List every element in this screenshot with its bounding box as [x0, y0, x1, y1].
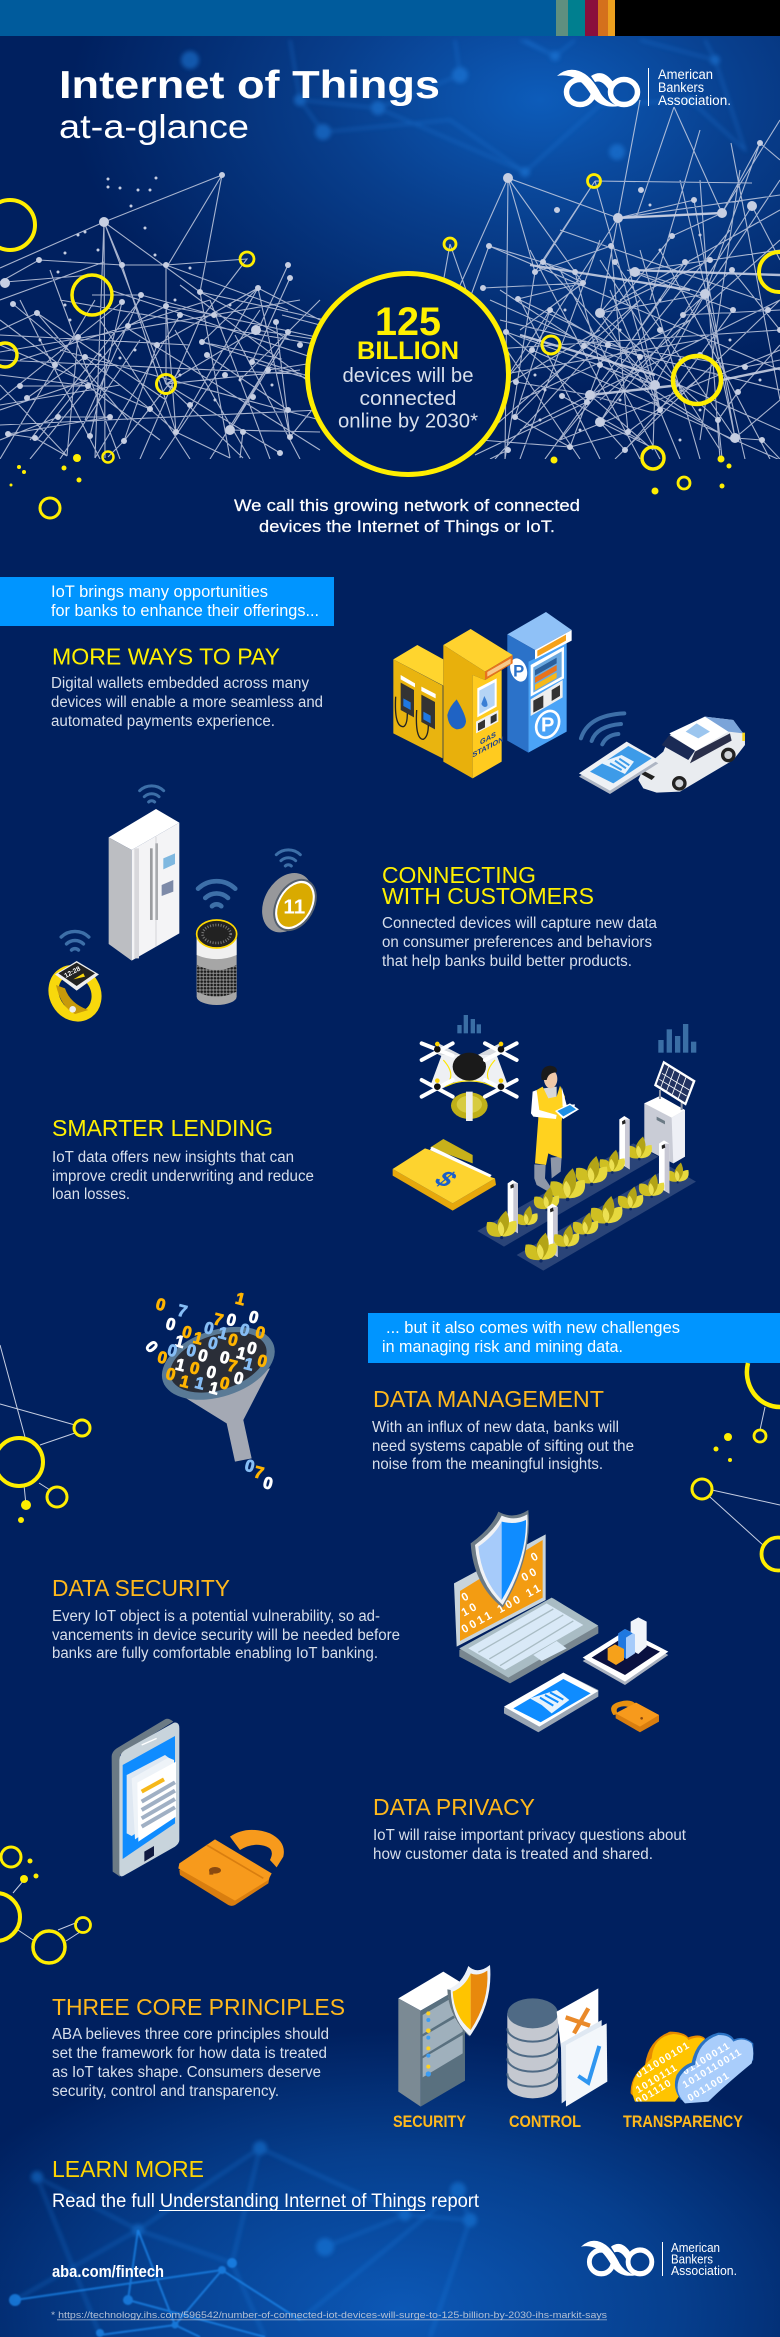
logo: American Bankers Association (bottom): Bankers — [671, 2252, 713, 2266]
icon: phone with bank — [579, 742, 658, 794]
data digits: 0 — [226, 1330, 240, 1350]
data digits: 0 — [256, 1351, 269, 1371]
funnel body — [153, 1314, 284, 1462]
banner: challenges — [368, 1313, 780, 1363]
data digits: 1 — [216, 1323, 230, 1344]
callout circle: 125 billion: online by 2030* — [338, 410, 478, 432]
yellow rings left — [0, 200, 254, 518]
plants and posts — [486, 1116, 689, 1263]
icon: folder with dollar: $ — [428, 1166, 465, 1192]
icon: smart speaker — [197, 920, 237, 1005]
logo: American Bankers Association (top): American — [658, 67, 713, 82]
icon: thermostat — [252, 864, 326, 941]
text block: connecting with customers — [382, 862, 657, 970]
icon: data clouds: 011000101 — [634, 2040, 693, 2081]
data digits: 0 — [154, 1294, 167, 1315]
text block: smarter lending: SMARTER LENDING — [52, 1115, 273, 1141]
logo: American Bankers Association (bottom): Association. — [671, 2264, 737, 2278]
icon: parking kiosk: P — [513, 662, 524, 681]
text block: data privacy: how customer data is treated and shared. — [373, 1846, 653, 1863]
text block: data privacy: DATA PRIVACY — [373, 1794, 535, 1820]
text block: more ways to pay: Digital wallets embedded across many — [51, 675, 309, 692]
text block: more ways to pay: automated payments experience. — [51, 713, 275, 730]
text block: learn more: Read the full Understanding Internet of Things report — [52, 2191, 480, 2212]
text block: learn more: LEARN MORE — [52, 2156, 204, 2182]
data digits: 1 — [242, 1354, 255, 1375]
banner: opportunities: for banks to enhance their offerings... — [51, 602, 319, 620]
banner: challenges: ... but it also comes with new challenges — [386, 1319, 680, 1337]
text block: connecting with customers: WITH CUSTOMERS — [382, 883, 594, 909]
title: Internet of Things — [59, 64, 440, 107]
data digits: 0 — [247, 1307, 260, 1328]
icon: folder with dollar — [393, 1139, 496, 1211]
data digits: 0 — [245, 1338, 259, 1359]
icon: data clouds: 1010110011 — [681, 2047, 745, 2091]
text block: three core principles: set the framework for how data is treated — [52, 2045, 327, 2062]
data digits: 0 — [164, 1364, 177, 1385]
blurred top network — [181, 40, 745, 177]
text block: data security: banks are fully comfortable enabling IoT banking. — [52, 1645, 378, 1662]
icon: data clouds — [631, 2032, 753, 2108]
data digits: 0 — [156, 1347, 169, 1368]
icon: data clouds: 1010111 — [634, 2062, 680, 2096]
logo: American Bankers Association (bottom) — [581, 2241, 737, 2278]
icons: principles — [398, 1965, 753, 2108]
callout circle: 125 billion: 125 — [375, 300, 441, 344]
data digits: 1 — [191, 1328, 205, 1349]
icon: fridge — [109, 809, 179, 961]
data digits: 0 — [238, 1320, 251, 1340]
icon: data clouds: 01100011 — [681, 2040, 733, 2078]
top glow — [0, 36, 780, 496]
data digits: 1 — [235, 1343, 248, 1364]
text block: three core principles: security, control and transparency. — [52, 2083, 279, 2100]
data digits: 0 — [166, 1340, 179, 1361]
text block: data management — [372, 1386, 634, 1473]
text block: data privacy: IoT will raise important privacy questions about — [373, 1827, 687, 1844]
icon: wifi signals — [61, 786, 300, 950]
data digits: 0 — [218, 1373, 231, 1394]
data digits: 1 — [178, 1371, 191, 1392]
text block: connecting with customers: on consumer preferences and behaviors — [382, 934, 652, 951]
text block: more ways to pay: MORE WAYS TO PAY — [52, 644, 280, 670]
bottom glow — [0, 1990, 780, 2337]
text block: connecting with customers: Connected devices will capture new data — [382, 915, 657, 932]
top colour bar — [0, 0, 780, 36]
icon: data clouds: 001110 — [634, 2077, 674, 2108]
icon: smart home devices — [45, 786, 326, 1024]
logo: American Bankers Association (bottom): American — [671, 2241, 720, 2255]
icon: thermostat: 11 — [283, 895, 305, 918]
title — [59, 64, 440, 145]
logo: American Bankers Association (top): Association. — [658, 93, 731, 108]
callout circle: 125 billion — [308, 274, 508, 474]
text block: three core principles: ABA believes three core principles should — [52, 2026, 329, 2043]
data digits: 1 — [173, 1331, 186, 1352]
principle labels: CONTROL — [509, 2113, 581, 2131]
icon: farmer — [531, 1066, 579, 1192]
decorative rings: right, upper — [692, 1363, 780, 1570]
text block: more ways to pay — [51, 644, 323, 730]
icon: laptop security — [454, 1510, 668, 1732]
text block: smarter lending: IoT data offers new insights that can — [52, 1149, 294, 1166]
icon: smart farm — [393, 1015, 696, 1271]
data digits: 1 — [207, 1378, 221, 1399]
data digits: 1 — [193, 1373, 206, 1394]
banner: challenges: in managing risk and mining data. — [382, 1338, 623, 1356]
icon: smart watch: 12:28 — [63, 965, 82, 980]
text block: connecting with customers: that help banks build better products. — [382, 953, 632, 970]
data digits: 0 — [185, 1340, 198, 1361]
intro text — [234, 496, 580, 536]
intro text: We call this growing network of connected — [234, 496, 580, 515]
growing beds — [477, 1143, 696, 1271]
banner: opportunities: IoT brings many opportunities — [51, 583, 268, 601]
icon: gas station kiosk: STATION — [472, 734, 504, 759]
footnote: * https://technology.ihs.com/596542/number-of-connected-iot-devices-will-surge-to-125-billion-by-2030-ihs-markit-says — [51, 2310, 607, 2321]
yellow rings right — [444, 174, 780, 494]
icon: open padlock — [178, 1830, 284, 1906]
data digits: 0 — [164, 1314, 177, 1335]
data digits: 0 — [205, 1362, 218, 1383]
data digits — [141, 1289, 275, 1494]
icon: laptop — [454, 1534, 598, 1683]
text block: connecting with customers: CONNECTING — [382, 862, 536, 888]
data digits: 7 — [212, 1309, 225, 1330]
principle labels — [393, 2113, 743, 2131]
data digits: 0 — [141, 1337, 162, 1356]
decorative rings: left, lower — [0, 1847, 90, 1963]
title: at-a-glance — [59, 108, 249, 145]
banner: opportunities — [0, 577, 334, 626]
icon: data clouds: 0011001 — [686, 2070, 732, 2104]
icon: tablet chart — [583, 1617, 668, 1685]
icon: fuel pump — [393, 645, 443, 758]
blurred bottom network — [15, 2141, 477, 2337]
callout circle: 125 billion: BILLION — [357, 337, 459, 365]
text block: smarter lending: improve credit underwriting and reduce — [52, 1168, 314, 1185]
data digits: 0 — [202, 1318, 216, 1339]
text block: smarter lending — [52, 1115, 314, 1203]
icon: parking kiosk: P — [541, 715, 554, 737]
text block: learn more — [52, 2156, 480, 2212]
chart icons — [457, 1015, 696, 1053]
data digits: 1 — [234, 1289, 247, 1309]
principle labels: SECURITY — [393, 2113, 466, 2131]
icon: smart watch — [45, 961, 105, 1024]
data digits: 0 — [225, 1310, 238, 1330]
intro text: devices the Internet of Things or IoT. — [259, 517, 555, 536]
text block: three core principles — [52, 1994, 345, 2100]
network graphic: left — [0, 175, 330, 459]
sharp bottom network — [9, 2230, 300, 2337]
data digits: 0 — [243, 1456, 256, 1476]
text block: data management: With an influx of new data, banks will — [372, 1419, 619, 1436]
icon: payment kiosks, phone and car — [393, 612, 745, 794]
data digits: 0 — [188, 1358, 201, 1379]
principle labels: TRANSPARENCY — [623, 2113, 743, 2131]
text block: data privacy — [373, 1794, 687, 1863]
icon: wifi — [581, 713, 624, 744]
icon: shield — [471, 1510, 529, 1608]
text block: data management: noise from the meaningful insights. — [372, 1456, 603, 1473]
text block: more ways to pay: devices will enable a more seamless and — [51, 694, 323, 711]
icon: laptop: 0 — [460, 1591, 471, 1604]
data digits: 7 — [226, 1356, 239, 1376]
icon: server with shield — [398, 1965, 490, 2107]
data digits: 0 — [218, 1347, 231, 1368]
text block: data management: need systems capable of sifting out the — [372, 1438, 634, 1455]
icon: laptop: 00 — [520, 1565, 541, 1584]
icon: laptop: 0 — [529, 1551, 540, 1564]
text block: smarter lending: loan losses. — [52, 1186, 130, 1203]
callout circle: 125 billion: devices will be — [342, 364, 474, 387]
data digits: 0 — [206, 1333, 220, 1354]
data digits: 0 — [261, 1473, 275, 1494]
data digits: 7 — [176, 1301, 189, 1321]
icon: parking kiosk — [507, 612, 572, 753]
logo: American Bankers Association (top): Bankers — [658, 80, 704, 95]
data digits: 1 — [174, 1355, 187, 1375]
data digits: 7 — [252, 1462, 266, 1483]
data digits: 0 — [180, 1322, 194, 1343]
data digits: 0 — [232, 1368, 245, 1389]
icon: laptop: 10 — [460, 1600, 481, 1619]
icon: car — [638, 717, 745, 793]
callout circle: 125 billion: connected — [360, 387, 456, 410]
icon: data funnel — [141, 1289, 284, 1494]
icon: drone — [422, 1042, 517, 1121]
decorative rings: left, upper — [0, 1345, 90, 1523]
icon: gas station kiosk: GAS — [480, 730, 496, 747]
icon: padlock — [611, 1701, 659, 1732]
text block: data security — [52, 1575, 400, 1662]
icon: gas station kiosk — [443, 629, 513, 778]
logo: American Bankers Association (top) — [557, 67, 731, 108]
network graphic: right — [440, 100, 780, 460]
text block: three core principles: THREE CORE PRINCIPLES — [52, 1994, 345, 2020]
icon: phone with bank — [504, 1673, 598, 1732]
text block: data security: DATA SECURITY — [52, 1575, 230, 1601]
icon: phone with documents — [112, 1719, 179, 1877]
data digits: 0 — [196, 1345, 210, 1366]
link: aba.com/fintech: aba.com/fintech — [52, 2262, 164, 2281]
text block: data management: DATA MANAGEMENT — [373, 1386, 604, 1412]
text block: three core principles: as IoT takes shape. Consumers deserve — [52, 2064, 321, 2081]
text block: data security: Every IoT object is a potential vulnerability, so ad- — [52, 1608, 380, 1625]
data digits: 0 — [254, 1322, 267, 1343]
icon: phone and padlock — [112, 1719, 284, 1906]
text block: data security: vancements in device security will be needed before — [52, 1627, 400, 1644]
icon: laptop: 0011 100 11 — [460, 1581, 545, 1636]
icon: database with documents — [507, 1988, 607, 2107]
icon: solar panel box — [644, 1061, 696, 1163]
